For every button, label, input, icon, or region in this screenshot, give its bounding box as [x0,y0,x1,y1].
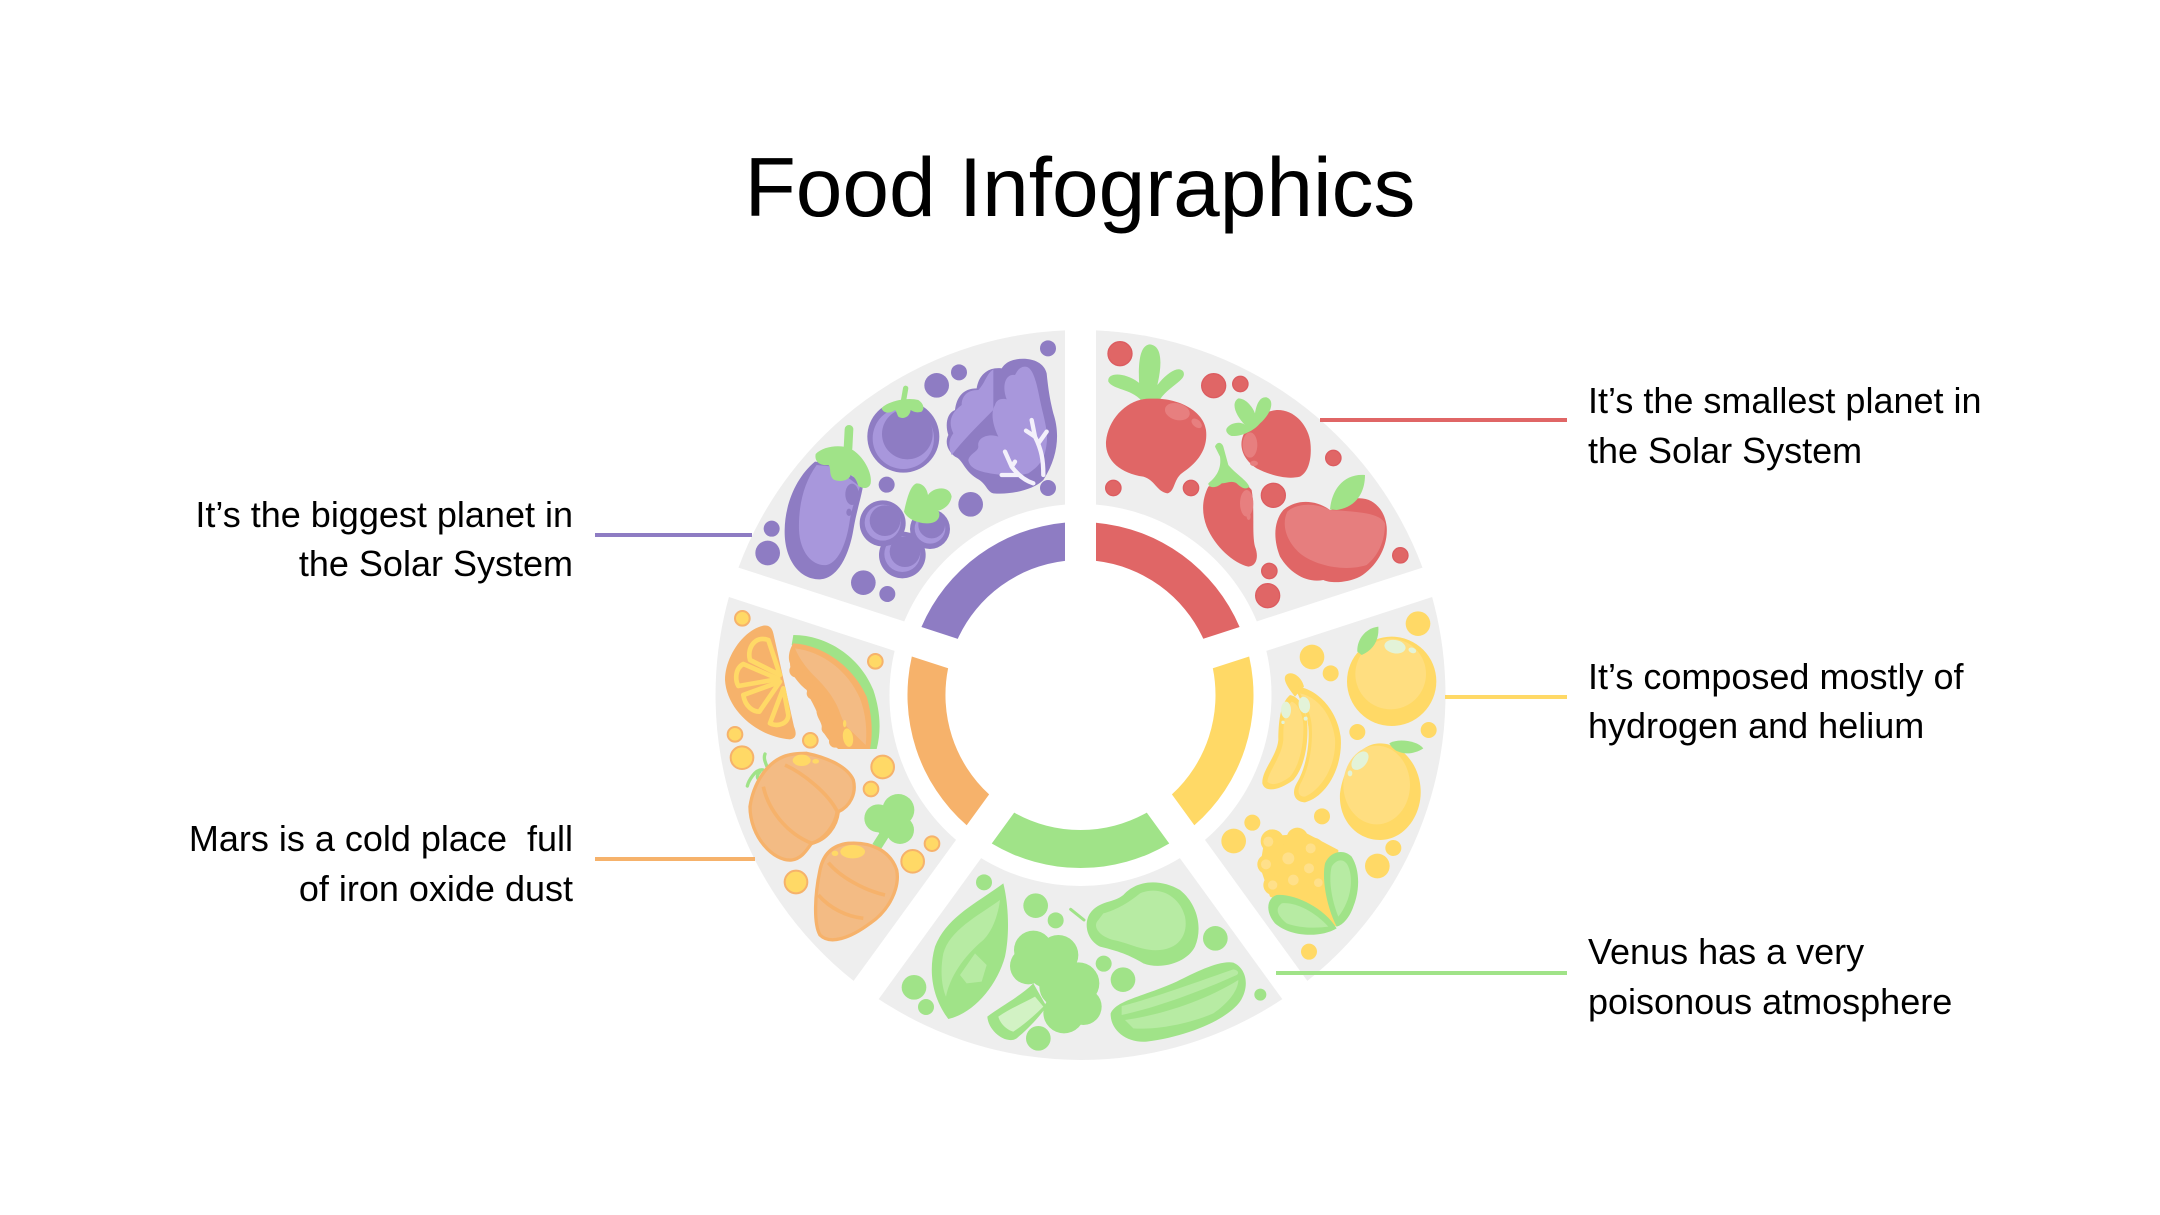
icon: radish [1106,344,1206,493]
text: orange description: Mars is a cold place full [189,818,573,859]
text: green description: poisonous atmosphere [1588,981,1952,1022]
text: purple description: the Solar System [299,543,573,584]
panel: green sector background [847,764,1282,1191]
icon: lemon [1340,741,1423,840]
text: green description [1588,931,1952,1022]
ring segment: orange [851,647,1035,825]
icon: round berry [867,388,939,473]
panel: purple sector background [738,257,1116,658]
panel: orange sector background [589,554,1025,981]
icon: orange fruit [1347,627,1436,726]
panel: yellow sector background [1155,597,1533,998]
icon: chili [1203,443,1257,567]
leader line: green [1276,971,1567,975]
text: red description: It’s the smallest planet in [1588,380,1982,421]
icon: carrot [816,794,914,940]
icon: grapes [860,483,952,578]
icons: purple foods [755,340,1057,602]
panel: red sector background [1096,330,1422,621]
leader line: red [1320,418,1567,422]
icon: pumpkin [747,753,854,860]
ring segment: yellow [1139,656,1294,829]
text: red description: the Solar System [1588,430,1862,471]
leader line: yellow [1445,695,1567,699]
icon: citrus slice [725,626,796,739]
text: purple description [195,494,573,584]
text: purple description: It’s the biggest planet in [195,494,573,534]
icon: corn [1257,828,1358,935]
text: orange description: of iron oxide dust [299,868,573,909]
text: yellow description: hydrogen and helium [1588,705,1924,746]
ring segment: red [1096,523,1240,639]
icon: eggplant [785,429,871,579]
text: red description [1588,380,1982,471]
icons: green foods [902,874,1266,1051]
leader line: purple [595,533,752,537]
icon: cucumber [1111,962,1246,1042]
icons: yellow foods [1221,611,1437,960]
icons: orange foods [725,611,939,940]
icon: pear [1071,882,1199,966]
ring segment: green [985,750,1169,928]
leader line: orange [595,857,755,861]
icon: lettuce [947,359,1057,494]
text: yellow description [1588,656,1964,746]
icon: pea pod [932,883,1008,1019]
icon: melon slice [789,635,880,749]
icons: red foods [1106,342,1408,608]
text: green description: Venus has a very [1588,931,1864,972]
title: Food Infographics [745,140,1415,234]
ring segment: purple [921,490,1076,663]
icon: bananas [1262,673,1341,802]
icon: apple [1275,475,1387,582]
icon: broccoli [987,931,1102,1040]
icon: strawberry [1226,397,1311,478]
text: orange description [189,818,573,909]
text: yellow description: It’s composed mostly of [1588,656,1964,696]
